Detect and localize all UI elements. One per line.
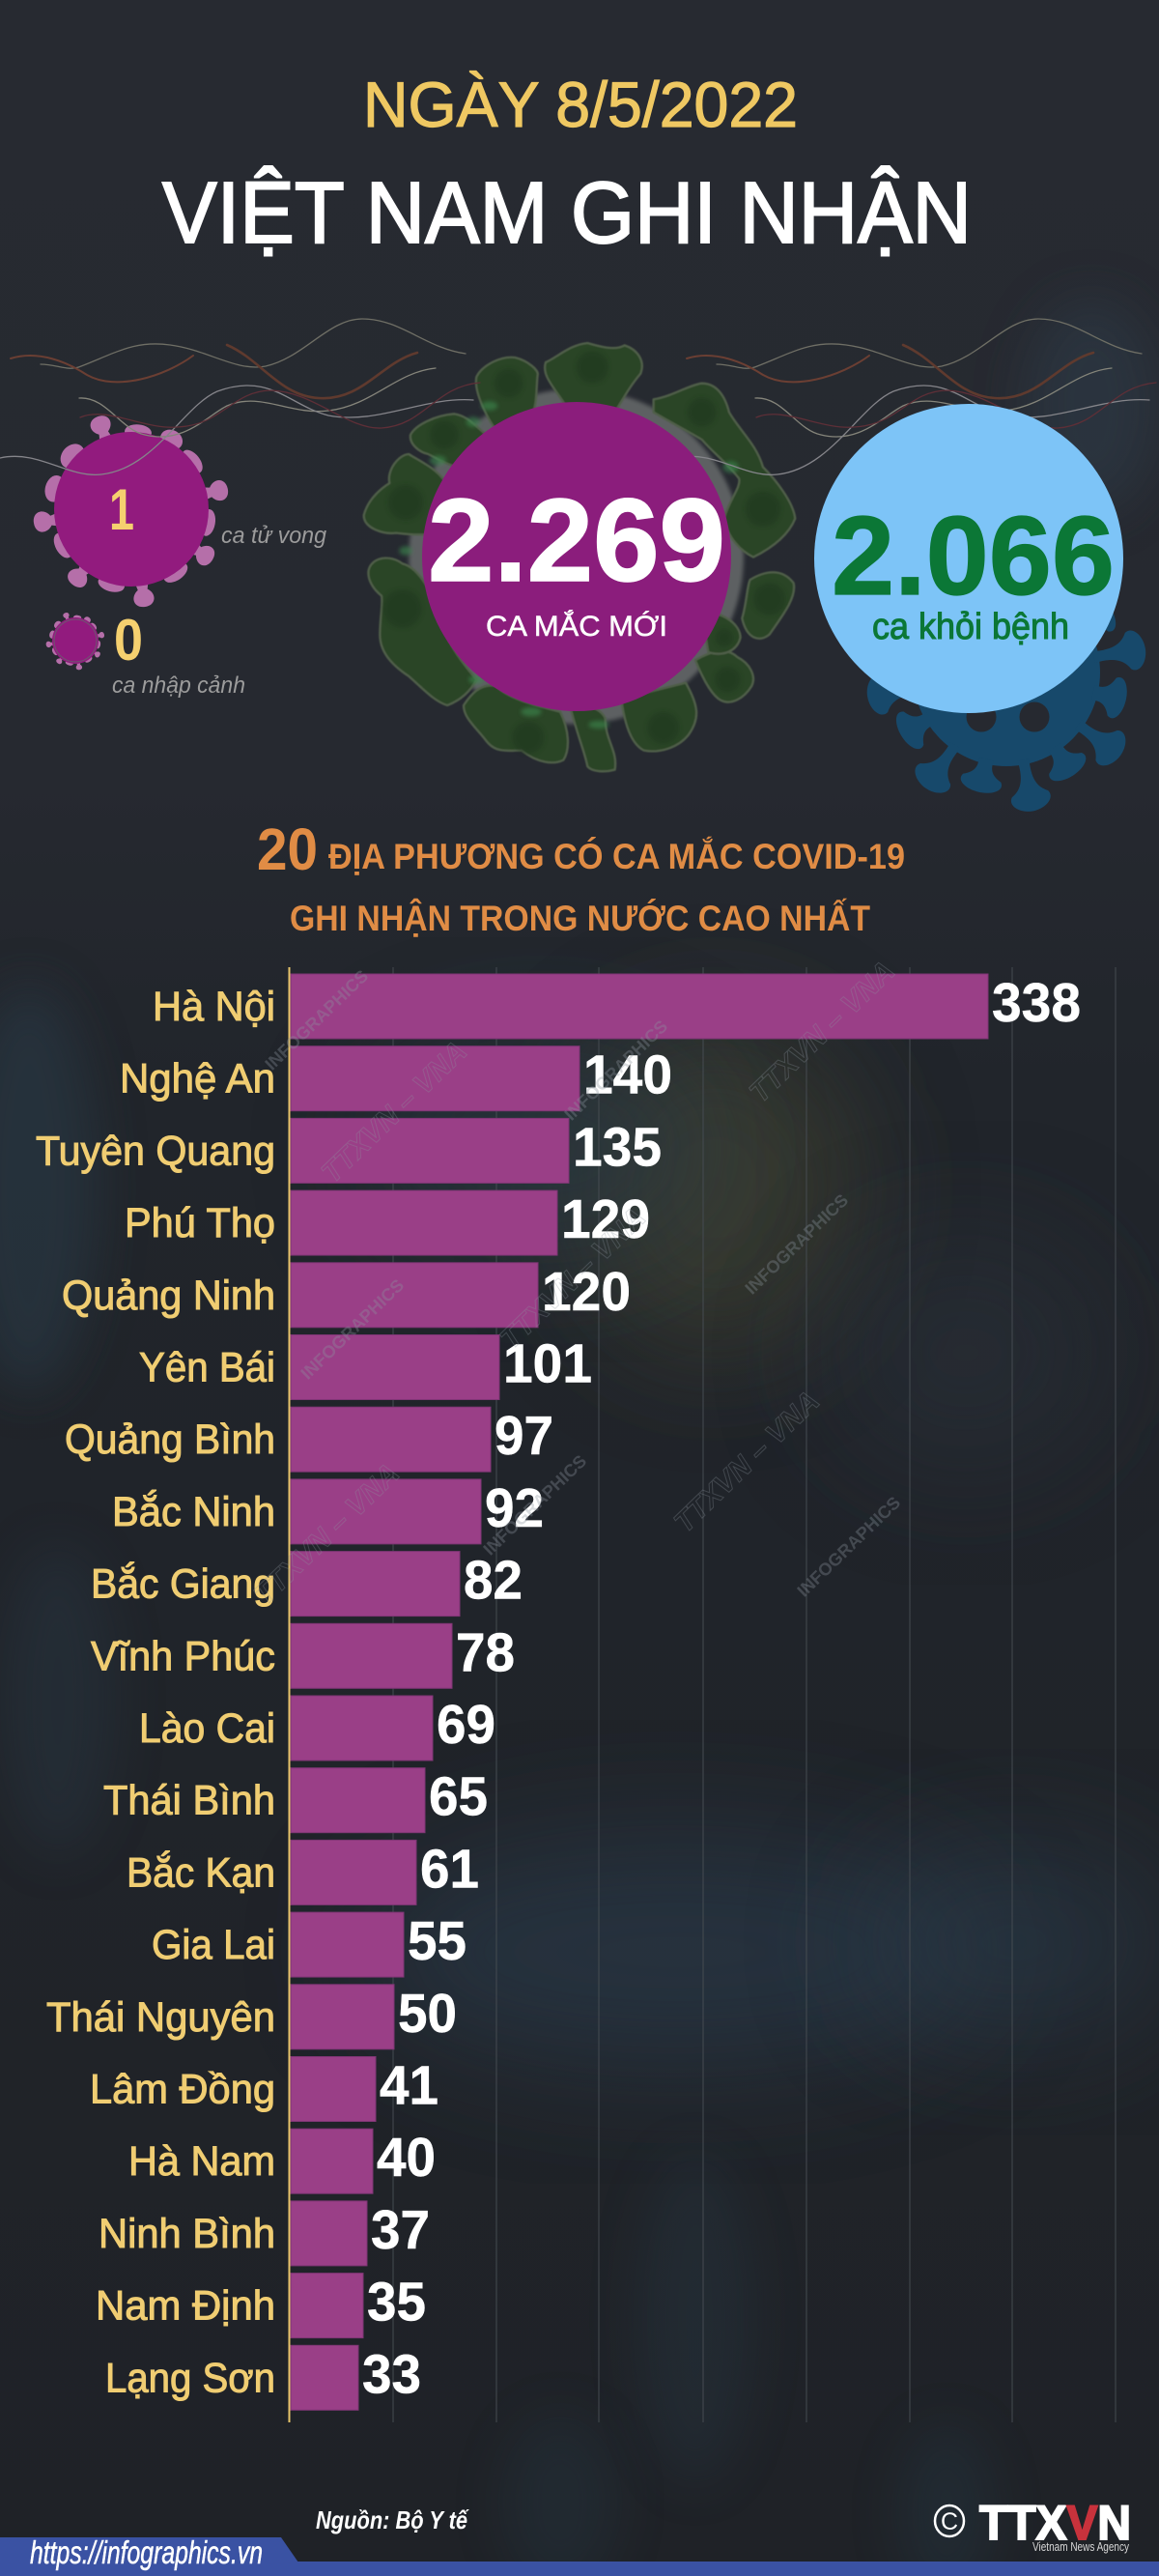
row: Tuyên Quang bbox=[36, 1116, 662, 1183]
number: new cases: 2.269 bbox=[428, 474, 725, 606]
icon: green coronavirus behind new cases bbox=[364, 343, 795, 771]
row: Nam Định: 35 bbox=[367, 2272, 426, 2333]
label: recovered cases: ca khỏi bệnh bbox=[872, 607, 1069, 647]
row: Yên Bái bbox=[139, 1333, 592, 1399]
watermarks: TTXVN – VNA bbox=[316, 1036, 473, 1189]
row: Thái Nguyên bbox=[46, 1983, 457, 2049]
watermarks: INFOGRAPHICS bbox=[561, 1016, 671, 1125]
row: Bắc Kạn: 61 bbox=[420, 1838, 479, 1900]
label: imported cases: ca nhập cảnh bbox=[112, 673, 245, 699]
row: Hà Nội bbox=[153, 972, 1081, 1039]
title: main heading: VIỆT NAM GHI NHẬN bbox=[162, 165, 972, 262]
row: Gia Lai: 55 bbox=[408, 1910, 466, 1972]
number: recovered cases: 2.066 bbox=[832, 493, 1115, 618]
decorative waves right bbox=[676, 319, 1156, 474]
label: deaths: ca tử vong bbox=[221, 523, 327, 549]
watermarks: INFOGRAPHICS bbox=[480, 1451, 590, 1560]
watermarks: INFOGRAPHICS bbox=[794, 1493, 904, 1601]
row: Phú Thọ: 129 bbox=[561, 1188, 650, 1250]
row: Quảng Ninh bbox=[62, 1261, 631, 1328]
watermarks: INFOGRAPHICS bbox=[262, 966, 372, 1074]
panel: new cases bbox=[422, 402, 731, 711]
watermarks: TTXVN – VNA bbox=[248, 1458, 406, 1612]
row: Hà Nam: Hà Nam bbox=[128, 2138, 275, 2185]
watermarks: TTXVN – VNA bbox=[495, 1202, 652, 1356]
number: deaths: 1 bbox=[109, 477, 134, 542]
row: Bắc Giang: Bắc Giang bbox=[91, 1561, 275, 1608]
row: Quảng Ninh: Quảng Ninh bbox=[62, 1273, 275, 1319]
watermarks: TTXVN – VNA bbox=[744, 956, 901, 1109]
logo: TTXVN: C bbox=[941, 2508, 958, 2535]
section heading: ĐỊA PHƯƠNG CÓ CA MẮC COVID-19 bbox=[328, 836, 905, 876]
row: Tuyên Quang: Tuyên Quang bbox=[36, 1128, 275, 1174]
row: Lào Cai: Lào Cai bbox=[139, 1705, 275, 1752]
row: Lâm Đồng: Lâm Đồng bbox=[90, 2066, 275, 2112]
label: new cases: CA MẮC MỚI bbox=[486, 610, 667, 643]
row: Bắc Giang bbox=[91, 1550, 523, 1617]
row: Nam Định: Nam Định bbox=[96, 2283, 275, 2330]
row: Phú Thọ: Phú Thọ bbox=[125, 1200, 275, 1246]
row: Yên Bái: Yên Bái bbox=[139, 1345, 275, 1391]
row: Phú Thọ bbox=[125, 1188, 650, 1255]
row: Lâm Đồng: 41 bbox=[380, 2054, 438, 2116]
row: Gia Lai bbox=[152, 1910, 466, 1977]
row: Hà Nội: 338 bbox=[992, 972, 1081, 1034]
number: imported cases: 0 bbox=[114, 608, 143, 673]
row: Thái Nguyên: 50 bbox=[398, 1983, 457, 2045]
row: Ninh Bình: Ninh Bình bbox=[99, 2211, 275, 2257]
watermarks: INFOGRAPHICS bbox=[297, 1275, 408, 1384]
row: Bắc Ninh bbox=[112, 1477, 544, 1544]
section heading bbox=[257, 816, 905, 938]
row: Nam Định bbox=[96, 2272, 426, 2338]
row: Lạng Sơn: Lạng Sơn bbox=[105, 2355, 275, 2401]
row: Thái Nguyên: Thái Nguyên bbox=[46, 1994, 275, 2041]
source note: Nguồn: Bộ Y tế bbox=[316, 2505, 469, 2534]
row: Nghệ An bbox=[120, 1045, 672, 1111]
row: Hà Nội: Hà Nội bbox=[153, 984, 275, 1030]
title: date: NGÀY 8/5/2022 bbox=[363, 69, 798, 140]
footer url: https://infographics.vn bbox=[30, 2534, 263, 2570]
section heading: GHI NHẬN TRONG NƯỚC CAO NHẤT bbox=[290, 898, 870, 938]
row: Yên Bái: 101 bbox=[503, 1333, 592, 1395]
icon: small purple virus, imported cases bbox=[45, 612, 105, 671]
icon: blue coronavirus behind recovered cases bbox=[864, 579, 1148, 815]
row: Lâm Đồng bbox=[90, 2054, 438, 2122]
row: Lạng Sơn bbox=[105, 2343, 421, 2410]
row: Thái Bình: Thái Bình bbox=[103, 1778, 275, 1824]
row: Tuyên Quang: 135 bbox=[573, 1116, 662, 1178]
logo: TTXVN: TTXVN bbox=[979, 2496, 1131, 2550]
row: Ninh Bình bbox=[99, 2199, 430, 2266]
watermarks: INFOGRAPHICS bbox=[742, 1190, 852, 1299]
bar chart bbox=[36, 967, 1116, 2422]
watermarks: TTXVN – VNA bbox=[668, 1386, 826, 1539]
row: Bắc Ninh: Bắc Ninh bbox=[112, 1489, 275, 1535]
row: Quảng Bình: Quảng Bình bbox=[65, 1417, 275, 1463]
row: Bắc Kạn: Bắc Kạn bbox=[127, 1849, 275, 1896]
row: Ninh Bình: 37 bbox=[371, 2199, 430, 2261]
row: Thái Bình bbox=[103, 1766, 488, 1833]
decorative waves left bbox=[0, 319, 480, 474]
row: Nghệ An: 140 bbox=[583, 1045, 672, 1106]
row: Bắc Kạn bbox=[127, 1838, 479, 1904]
row: Hà Nam bbox=[128, 2127, 436, 2193]
row: Lạng Sơn: 33 bbox=[362, 2343, 421, 2405]
section heading: 20 bbox=[257, 816, 318, 882]
row: Quảng Bình bbox=[65, 1405, 553, 1472]
footer bar bbox=[0, 2534, 1159, 2576]
icon: purple virus, deaths bbox=[33, 414, 230, 608]
row: Bắc Ninh: 92 bbox=[485, 1477, 544, 1539]
row: Quảng Bình: 97 bbox=[495, 1405, 553, 1467]
row: Quảng Ninh: 120 bbox=[542, 1261, 631, 1323]
row: Vĩnh Phúc: 78 bbox=[456, 1621, 515, 1683]
row: Lào Cai bbox=[139, 1694, 495, 1760]
row: Bắc Giang: 82 bbox=[464, 1550, 523, 1612]
row: Vĩnh Phúc: Vĩnh Phúc bbox=[91, 1633, 275, 1679]
row: Hà Nam: 40 bbox=[377, 2127, 436, 2189]
row: Gia Lai: Gia Lai bbox=[152, 1922, 275, 1968]
row: Thái Bình: 65 bbox=[429, 1766, 488, 1828]
logo: TTXVN: Vietnam News Agency bbox=[1032, 2539, 1129, 2554]
watermarks bbox=[248, 956, 904, 1612]
row: Nghệ An: Nghệ An bbox=[120, 1056, 275, 1102]
row: Lào Cai: 69 bbox=[437, 1694, 495, 1756]
row: Vĩnh Phúc bbox=[91, 1621, 515, 1688]
panel: recovered cases bbox=[814, 404, 1123, 713]
